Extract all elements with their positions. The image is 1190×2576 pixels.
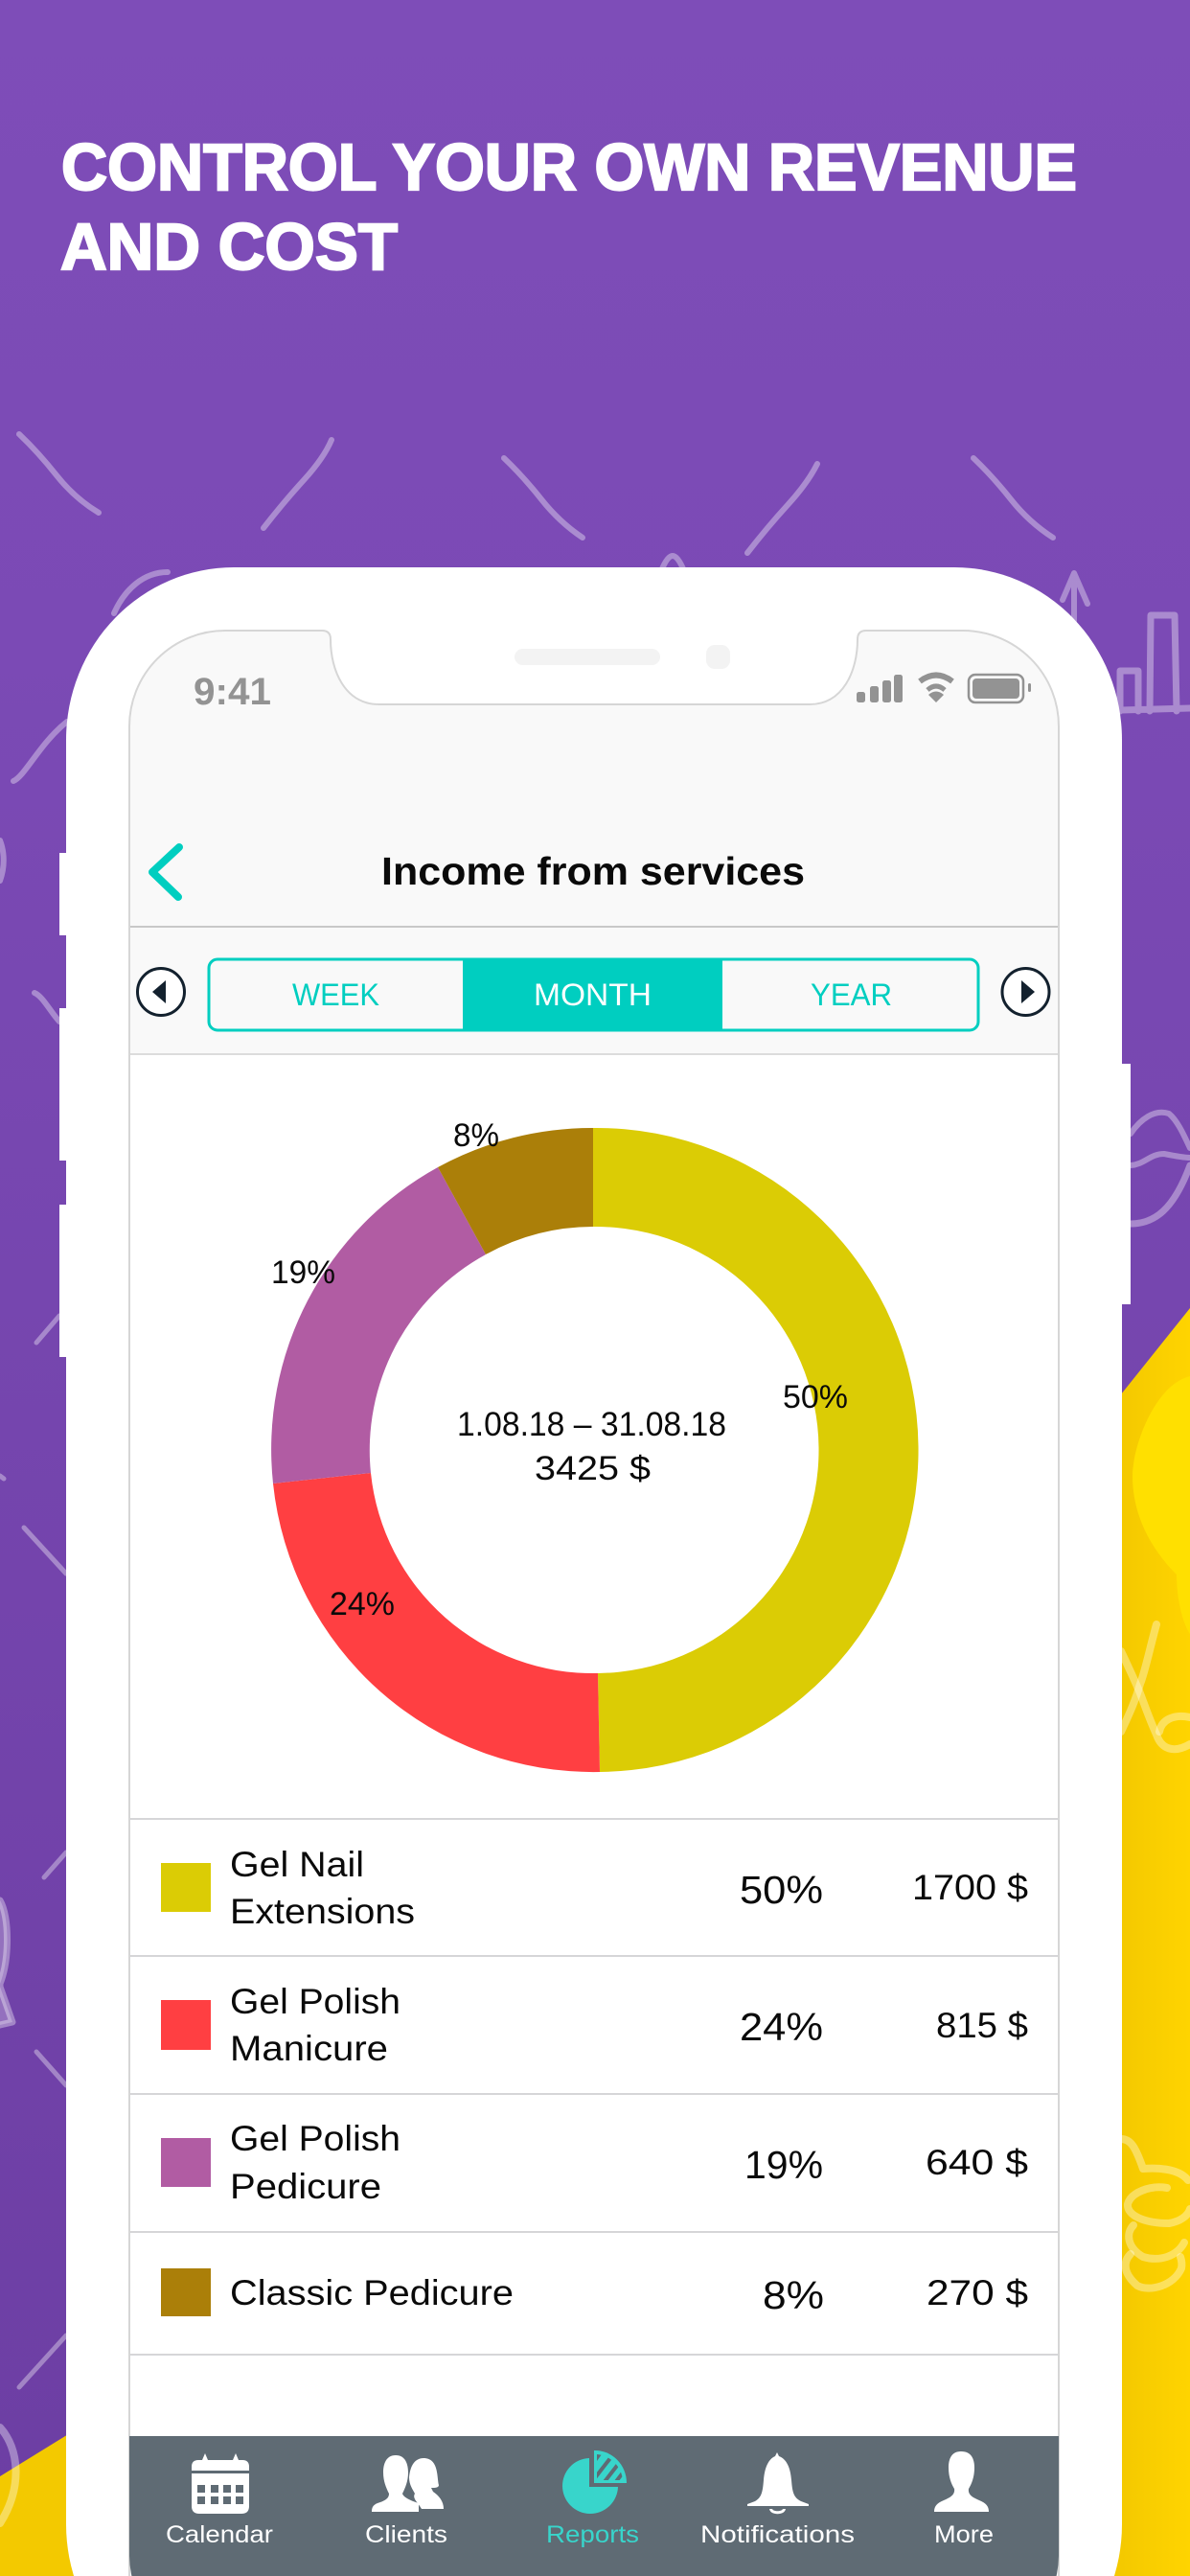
yellow background shape: left bbox=[0, 2405, 115, 2576]
screen title: Income from services bbox=[381, 849, 805, 893]
row: gel polish manicure bbox=[161, 1982, 1028, 2068]
chart centre label: 1.08.18 – 31.08.18 bbox=[457, 1406, 726, 1443]
phone body bbox=[66, 567, 1122, 2576]
phone side buttons bbox=[59, 853, 1131, 1357]
donut chart: 19% bbox=[271, 1254, 335, 1291]
row: gel polish manicure: Gel Polish bbox=[230, 1982, 400, 2021]
tab: notifications bbox=[700, 2452, 855, 2548]
row: gel nail extensions bbox=[161, 1845, 1028, 1931]
tab: clients bbox=[365, 2455, 447, 2548]
icon: wifi bbox=[920, 675, 952, 702]
row: gel polish manicure: 24% bbox=[740, 2005, 823, 2049]
tab: notifications: Notifications bbox=[700, 2521, 855, 2548]
phone mockup bbox=[59, 567, 1131, 2576]
donut chart: 8% bbox=[453, 1117, 499, 1154]
status bar bbox=[194, 671, 1031, 713]
row: gel polish manicure: 815 $ bbox=[936, 2006, 1028, 2045]
donut chart: 24% bbox=[330, 1586, 395, 1622]
segmented control: YEAR bbox=[811, 978, 892, 1012]
icon: signal bbox=[857, 675, 903, 702]
row: gel polish pedicure: Pedicure bbox=[230, 2167, 381, 2206]
phone screen bbox=[129, 631, 1059, 2576]
row: gel nail extensions: 1700 $ bbox=[912, 1868, 1028, 1907]
tab: calendar: Calendar bbox=[166, 2521, 273, 2548]
camera bbox=[706, 645, 730, 669]
tab: reports (active) bbox=[546, 2446, 639, 2548]
heading: CONTROL YOUR OWN REVENUE bbox=[61, 130, 1077, 204]
content background bbox=[130, 1054, 1058, 2436]
segmented control: MONTH bbox=[534, 978, 652, 1012]
legend table bbox=[130, 1818, 1058, 2356]
row: gel polish pedicure: 640 $ bbox=[926, 2143, 1028, 2182]
tab: clients: Clients bbox=[365, 2521, 447, 2548]
row: gel polish pedicure: 19% bbox=[744, 2143, 823, 2187]
period selector bbox=[138, 958, 1049, 1030]
row: classic pedicure: 8% bbox=[763, 2273, 824, 2317]
chart centre label bbox=[457, 1406, 726, 1487]
heading bbox=[60, 130, 1077, 284]
row: gel polish pedicure: Gel Polish bbox=[230, 2119, 400, 2158]
speaker bbox=[515, 649, 660, 665]
tab: reports (active): Reports bbox=[546, 2521, 639, 2548]
row: gel nail extensions: Gel Nail bbox=[230, 1845, 364, 1884]
row: gel polish pedicure bbox=[161, 2119, 1028, 2206]
row: gel nail extensions: 50% bbox=[740, 1868, 823, 1912]
donut chart bbox=[271, 1117, 919, 1772]
yellow background shape: right bbox=[1083, 1308, 1190, 2576]
tab: more: More bbox=[934, 2521, 994, 2548]
row: gel polish manicure: Manicure bbox=[230, 2029, 388, 2068]
donut chart: 50% bbox=[783, 1379, 848, 1415]
heading: AND COST bbox=[60, 210, 398, 284]
icon: back chevron bbox=[152, 847, 179, 897]
segmented control: WEEK bbox=[292, 978, 379, 1012]
icon: previous arrow bbox=[138, 968, 184, 1016]
tab: calendar bbox=[166, 2453, 273, 2548]
icon: light bulb background shape bbox=[1133, 1376, 1190, 1634]
chart centre label: 3425 $ bbox=[535, 1450, 651, 1487]
bottom tab bar bbox=[129, 2436, 1059, 2576]
segmented control bbox=[209, 958, 978, 1030]
icon: next arrow bbox=[1002, 968, 1049, 1016]
row: gel nail extensions: Extensions bbox=[230, 1892, 415, 1931]
row: classic pedicure bbox=[161, 2268, 1028, 2317]
row: classic pedicure: 270 $ bbox=[927, 2273, 1028, 2312]
icon: battery bbox=[969, 675, 1031, 702]
navigation bar bbox=[130, 847, 1058, 928]
row: classic pedicure: Classic Pedicure bbox=[230, 2273, 514, 2312]
clock: 9:41 bbox=[194, 671, 271, 713]
tab: more bbox=[934, 2451, 994, 2548]
